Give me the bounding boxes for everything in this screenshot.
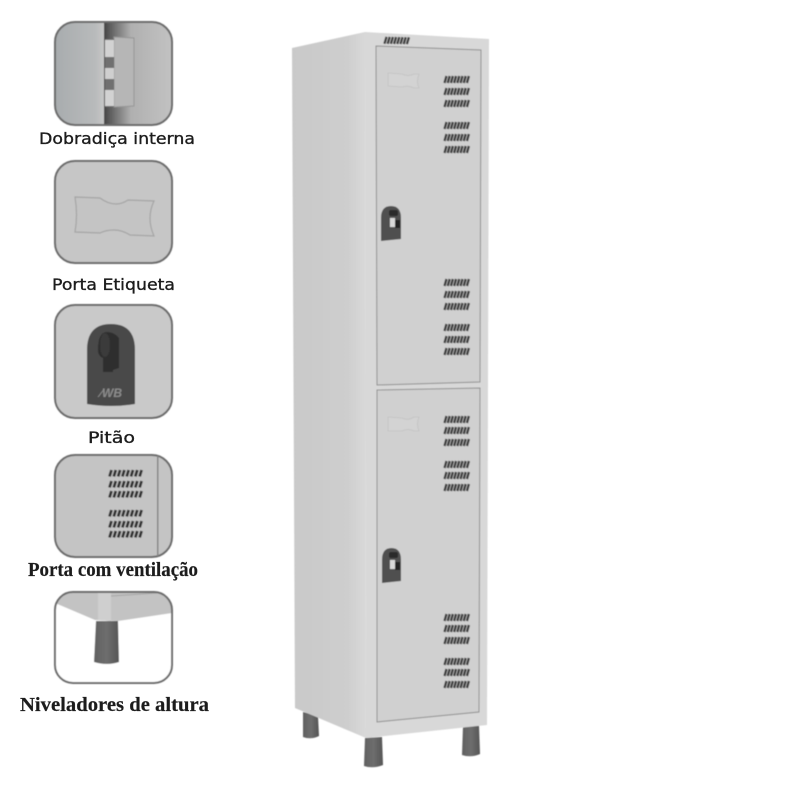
- icon: front foot: [364, 737, 383, 767]
- heading: levelling feet label: Niveladores de altura: [20, 694, 209, 716]
- panel: upper door: [376, 46, 481, 385]
- icon: latch logo: ∕WB: [97, 386, 122, 400]
- panel: locker front frame: [365, 32, 489, 738]
- icon: rear left foot: [303, 712, 319, 738]
- panel: internal hinge thumbnail: [55, 22, 172, 125]
- icon: lower latch: [382, 548, 401, 583]
- icon: upper ventilation bottom: [444, 279, 469, 355]
- icon: top ventilation: [384, 37, 409, 44]
- heading: internal hinge label: Dobradiça interna: [39, 129, 195, 148]
- panel: levelling feet thumbnail: [55, 592, 172, 683]
- panel: label holder thumbnail: [55, 161, 172, 263]
- heading: latch label: Pitão: [88, 428, 135, 447]
- heading: label holder label: Porta Etiqueta: [52, 275, 175, 294]
- panel: latch thumbnail: [55, 305, 172, 418]
- icon: latch body: [87, 324, 135, 406]
- heading: ventilated door label: Porta com ventilação: [28, 559, 198, 581]
- icon: lower label holder: [388, 417, 419, 431]
- panel: lower door: [377, 388, 480, 722]
- icon: upper ventilation top: [444, 76, 469, 153]
- icon: ventilation slots: [110, 470, 142, 538]
- panel: ventilated door thumbnail: [55, 455, 172, 557]
- icon: lower ventilation top: [444, 416, 469, 491]
- icon: lower ventilation bottom: [444, 614, 469, 688]
- icon: upper label holder: [388, 73, 419, 88]
- icon: hinge plate: [114, 37, 134, 107]
- icon: label holder outline: [75, 197, 154, 236]
- icon: levelling foot: [94, 621, 119, 664]
- icon: right foot: [462, 725, 480, 756]
- locker illustration: [292, 32, 489, 767]
- panel: locker side: [292, 32, 366, 738]
- icon: upper latch: [381, 206, 401, 241]
